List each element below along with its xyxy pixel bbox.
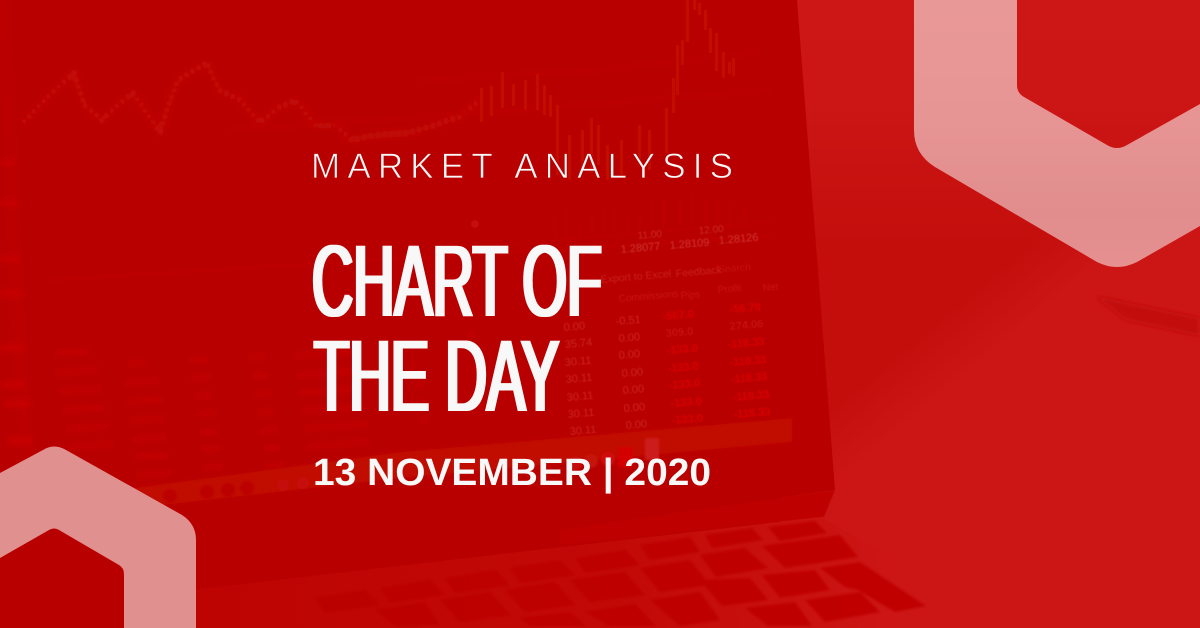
commissions column bbox=[615, 314, 648, 432]
taskbar strip on screen bbox=[120, 418, 792, 510]
trading platform table, right columns bbox=[563, 224, 779, 438]
toolbar actions: Feedback bbox=[675, 264, 723, 280]
pips column bbox=[662, 308, 703, 427]
laptop screen bbox=[0, 0, 835, 628]
pips column: -133.0 bbox=[667, 360, 699, 375]
pips column: -133.0 bbox=[671, 412, 703, 427]
title line 2: THE DAY bbox=[314, 319, 559, 433]
title bbox=[312, 223, 602, 433]
chart axis labels: 11.00 bbox=[637, 229, 663, 242]
profit column bbox=[727, 301, 771, 421]
swap column: 30.11 bbox=[569, 424, 597, 438]
hexagon outline: top right bbox=[914, 0, 1200, 267]
swap column: 35.74 bbox=[564, 337, 593, 351]
background: desk surface bbox=[780, 0, 1200, 628]
laptop hinge bbox=[560, 490, 835, 545]
candlestick chart: sharper right part bbox=[480, 0, 735, 180]
toolbar price values: 1.28109 bbox=[669, 237, 710, 252]
toolbar price values bbox=[620, 232, 759, 256]
chart axis labels bbox=[637, 224, 725, 242]
pips column: -133.0 bbox=[666, 342, 698, 357]
pips column: -133.0 bbox=[670, 395, 702, 410]
chart axis labels: 12.00 bbox=[698, 224, 725, 237]
screen left bezel highlight bbox=[0, 0, 34, 470]
profit column: -118.33 bbox=[727, 336, 765, 351]
profit column: -118.33 bbox=[730, 371, 768, 386]
toolbar price values: 1.28126 bbox=[718, 232, 759, 247]
commissions column: 0.00 bbox=[618, 348, 641, 362]
swap column bbox=[563, 320, 597, 438]
laptop keyboard deck bbox=[190, 517, 1010, 628]
swap column: 30.11 bbox=[564, 355, 592, 369]
candlestick chart: blurred left part bbox=[23, 52, 770, 140]
pips column: -567.0 bbox=[662, 308, 694, 323]
column headings: Commissions bbox=[618, 289, 679, 305]
swap column: 0.00 bbox=[563, 320, 586, 334]
toolbar actions bbox=[600, 261, 752, 286]
commissions column: 0.00 bbox=[622, 383, 645, 397]
column headings bbox=[618, 282, 779, 305]
pips column: 309.0 bbox=[665, 326, 694, 340]
volume bars and time axis bbox=[50, 192, 772, 280]
keys bbox=[315, 521, 926, 626]
text block bbox=[311, 147, 733, 494]
profit column: -118.33 bbox=[729, 354, 767, 369]
column headings: Net bbox=[762, 282, 779, 294]
title line 1: CHART OF bbox=[312, 223, 602, 338]
blurred table rows, left columns bbox=[55, 321, 486, 484]
profit column: 274.06 bbox=[729, 318, 764, 333]
commissions column: 0.00 bbox=[623, 401, 646, 415]
commissions column: 0.00 bbox=[618, 331, 641, 345]
commissions column: -0.51 bbox=[615, 314, 641, 328]
column headings: Profit bbox=[717, 283, 742, 296]
date: 13 NOVEMBER | 2020 bbox=[313, 452, 711, 494]
swap column: 30.11 bbox=[565, 372, 593, 386]
chart marker dot bbox=[471, 220, 479, 228]
toolbar actions: Export to Excel bbox=[600, 268, 672, 286]
profit column: -118.33 bbox=[732, 389, 770, 404]
eyebrow: market analysis: MARKET ANALYSIS bbox=[311, 147, 733, 186]
commissions column: 0.00 bbox=[621, 366, 644, 380]
commissions column: 0.00 bbox=[625, 418, 648, 432]
hexagon outline: bottom left bbox=[0, 446, 196, 628]
toolbar actions: Search bbox=[717, 261, 752, 276]
profit column: -118.33 bbox=[733, 406, 771, 421]
pips column: -133.0 bbox=[668, 377, 700, 392]
profit column: -56.70 bbox=[729, 301, 761, 316]
swap column: 30.11 bbox=[567, 407, 595, 421]
taskbar app icons bbox=[163, 438, 659, 503]
toolbar price values: 1.28077 bbox=[620, 241, 661, 256]
column headings: Pips bbox=[680, 289, 701, 302]
left edge price labels bbox=[0, 160, 33, 445]
swap column: 30.11 bbox=[566, 390, 594, 404]
